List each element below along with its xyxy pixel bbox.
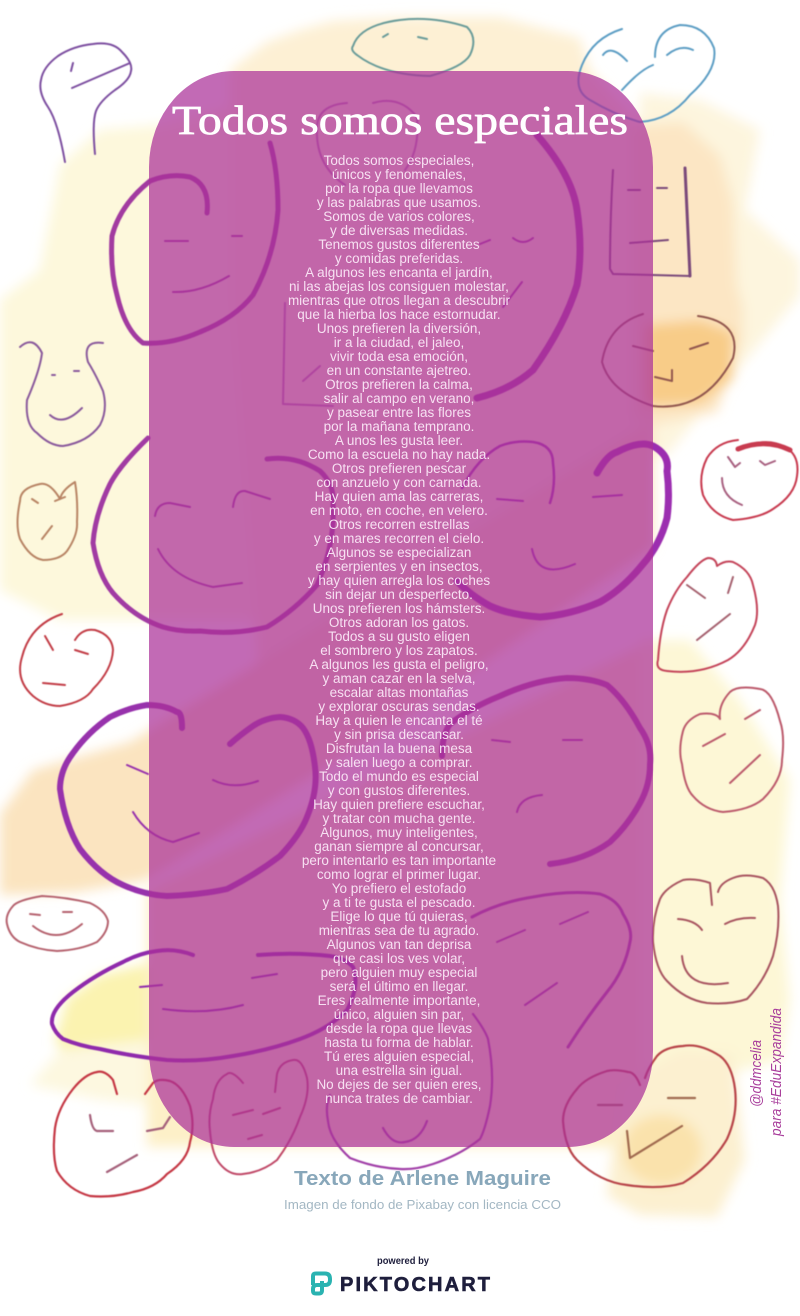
poem text: único, alguien sin par,	[334, 1007, 464, 1022]
credit: text author: Texto de Arlene Maguire	[294, 1168, 551, 1190]
poem text: Elige lo que tú quieras,	[330, 909, 468, 924]
poem text: Todo el mundo es especial	[319, 769, 479, 784]
poem text: y de diversas medidas.	[330, 223, 468, 238]
big face: upper left	[112, 143, 278, 343]
big face: centre left	[93, 438, 333, 632]
poem text: y salen luego a comprar.	[325, 755, 473, 770]
poem text: A unos les gusta leer.	[335, 433, 463, 448]
poem text: en serpientes y en insectos,	[315, 559, 483, 574]
poem text: Somos de varios colores,	[323, 209, 475, 224]
poem text: y sin prisa descansar.	[334, 727, 464, 742]
poem text: sin dejar un desperfecto.	[325, 587, 473, 602]
poem text: y pasear entre las flores	[327, 405, 471, 420]
poem text: Hay quien prefiere escuchar,	[313, 797, 485, 812]
face: bottom left narrow	[209, 1060, 308, 1174]
poem text: y las palabras que usamos.	[317, 195, 481, 210]
poem text: Eres realmente importante,	[318, 993, 480, 1008]
big face: upper centre	[283, 101, 418, 406]
title: Todos somos especiales	[172, 97, 628, 143]
credit: image source: Imagen de fondo de Pixabay con licencia CCO	[284, 1197, 561, 1212]
poem text: Algunos se especializan	[327, 545, 471, 560]
poem text: una estrella sin igual.	[336, 1063, 462, 1078]
face: yellow heart right	[680, 688, 783, 812]
poem text: como lograr el primer lugar.	[317, 867, 481, 882]
face: red left	[20, 614, 113, 706]
poem text: y comidas preferidas.	[335, 251, 463, 266]
poem text: por la mañana temprano.	[324, 419, 474, 434]
big face: bottom right	[472, 893, 631, 1047]
author handle vertical: para #EduExpandida	[768, 1008, 785, 1137]
poem text: desde la ropa que llevas	[326, 1021, 472, 1036]
poem text: Yo prefiero el estofado	[332, 881, 466, 896]
poem text	[288, 153, 510, 1106]
poem text: A algunos les gusta el peligro,	[309, 657, 489, 672]
face: bottom right red	[563, 1045, 736, 1187]
poem text: y aman cazar en la selva,	[322, 671, 476, 686]
poem text: No dejes de ser quien eres,	[316, 1077, 482, 1092]
piktochart wordmark: PIKTOCHART	[340, 1274, 490, 1296]
face: bottom centre purple	[327, 1014, 492, 1169]
poem text: nunca trates de cambiar.	[325, 1091, 473, 1106]
powered by label: powered by	[377, 1256, 429, 1267]
poem text: con anzuelo y con carnada.	[316, 475, 482, 490]
poem text: mientras sea de tu agrado.	[319, 923, 479, 938]
face: top right blue	[578, 25, 714, 122]
poem text: Tenemos gustos diferentes	[318, 237, 480, 252]
panel: poem background	[149, 71, 653, 1147]
poem text: ni las abejas los consiguen molestar,	[289, 279, 509, 294]
author handle vertical	[748, 1008, 785, 1137]
big face: upper right	[477, 135, 580, 398]
poem text: Todos somos especiales,	[324, 153, 474, 168]
poem text: Otros recorren estrellas	[328, 517, 470, 532]
poem text: y a ti te gusta el pescado.	[322, 895, 476, 910]
poem text: y tratar con mucha gente.	[322, 811, 476, 826]
face: bottom left red	[54, 1072, 192, 1196]
poem text: será el último en llegar.	[330, 979, 468, 994]
poem text: mientras que otros llegan a descubrir	[288, 293, 510, 308]
poem text: Como la escuela no hay nada.	[308, 447, 490, 462]
face: salmon right	[657, 558, 757, 672]
poem text: Algunos van tan deprisa	[327, 937, 471, 952]
author handle vertical: @ddmcelia	[748, 1040, 765, 1107]
poem text: el sombrero y los zapatos.	[320, 643, 478, 658]
poem text: Unos prefieren los hámsters.	[313, 601, 485, 616]
poem text: en moto, en coche, en velero.	[310, 503, 488, 518]
poem text: Tú eres alguien especial,	[324, 1049, 474, 1064]
poem text: y hay quien arregla los coches	[308, 573, 490, 588]
poem text: que la hierba los hace estornudar.	[297, 307, 501, 322]
big face: centre right	[457, 442, 668, 617]
poem text: Otros prefieren la calma,	[325, 377, 473, 392]
face: small orange left	[18, 482, 77, 560]
icon: piktochart logo	[313, 1274, 330, 1294]
face: oval left	[7, 896, 108, 951]
face: orange right	[602, 314, 735, 407]
poem text: Todos a su gusto eligen	[328, 629, 470, 644]
face: square right	[610, 168, 690, 276]
poem text: hasta tu forma de hablar.	[324, 1035, 474, 1050]
poem text: Disfrutan la buena mesa	[326, 741, 472, 756]
face: top centre teal	[352, 19, 473, 76]
poem text: y con gustos diferentes.	[328, 783, 470, 798]
poem text: salir al campo en verano,	[324, 391, 474, 406]
poem text: pero intentarlo es tan importante	[302, 853, 496, 868]
poem text: y en mares recorren el cielo.	[314, 531, 484, 546]
poem text: escalar altas montañas	[330, 685, 468, 700]
big face: lower right	[442, 678, 650, 864]
poem text: y explorar oscuras sendas.	[318, 699, 480, 714]
poem text: pero alguien muy especial	[321, 965, 477, 980]
poem text: Otros adoran los gatos.	[329, 615, 469, 630]
big face: lower left	[60, 705, 316, 896]
poem text: Otros prefieren pescar	[332, 461, 466, 476]
poem text: vivir toda esa emoción,	[330, 349, 468, 364]
poem text: ganan siempre al concursar,	[314, 839, 484, 854]
poem text: Hay a quien le encanta el té	[315, 713, 483, 728]
poem text: Algunos, muy inteligentes,	[320, 825, 478, 840]
poem text: únicos y fenomenales,	[332, 167, 466, 182]
poem text: Unos prefieren la diversión,	[317, 321, 481, 336]
face: top left purple	[40, 43, 131, 162]
big face: bottom wide	[52, 950, 355, 1060]
poem text: ir a la ciudad, el jaleo,	[334, 335, 464, 350]
poem text: que casi los ves volar,	[333, 951, 465, 966]
face: right smiling	[653, 876, 778, 1004]
poem text: por la ropa que llevamos	[325, 181, 473, 196]
poem text: A algunos les encanta el jardín,	[305, 265, 493, 280]
poem text: Hay quien ama las carreras,	[315, 489, 483, 504]
poem text: en un constante ajetreo.	[327, 363, 471, 378]
face: red circle right	[701, 440, 798, 520]
face: purple U left	[20, 342, 105, 446]
